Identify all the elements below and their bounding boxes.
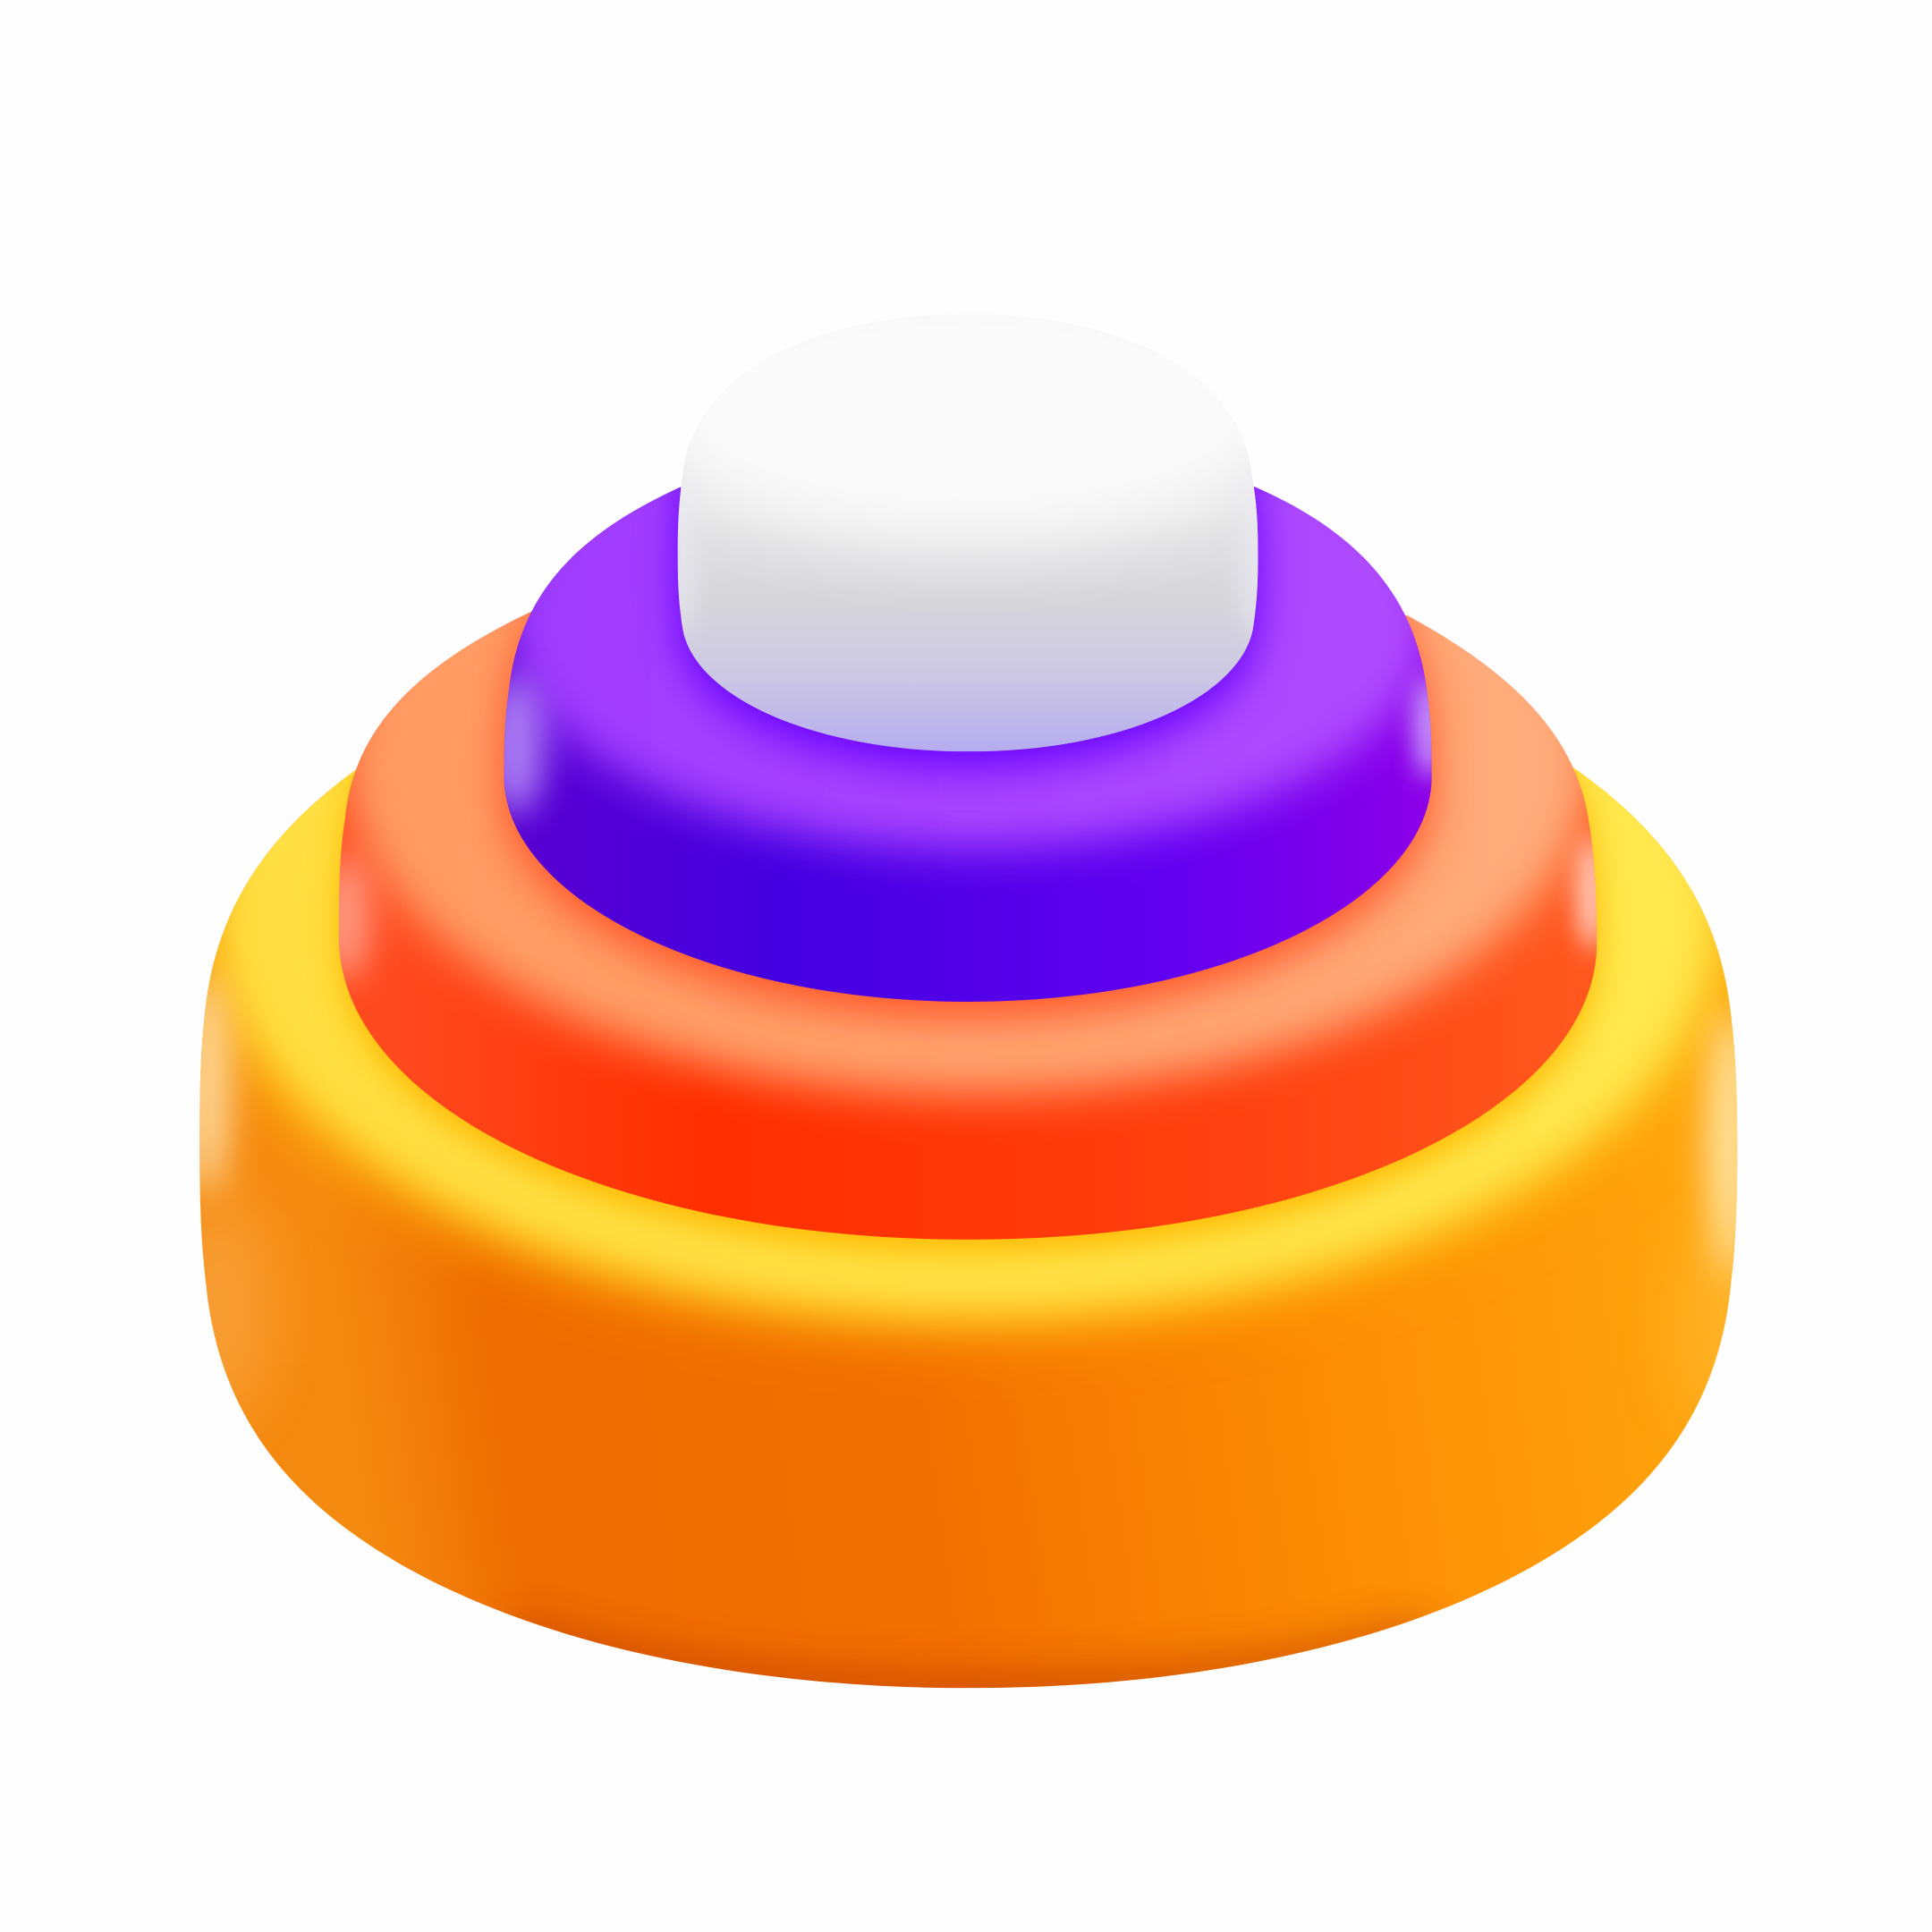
- layer: yellow-orange base: [199, 767, 1737, 1689]
- layer: red-orange tier: [338, 612, 1597, 1240]
- contact shadow under white cap: [654, 487, 1283, 791]
- contact shadow under purple tier: [476, 612, 1462, 1046]
- contact shadow under orange tier: [320, 767, 1617, 1272]
- illustration: stacked rounded layers: [199, 435, 1737, 1689]
- layer: purple tier: [504, 487, 1432, 1002]
- layer: white top cap: [678, 419, 1258, 751]
